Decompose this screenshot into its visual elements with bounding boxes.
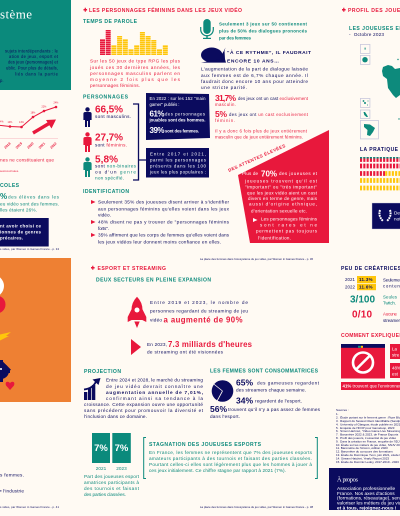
stat: masculins [95, 105, 131, 119]
heading: à ce rythme [227, 49, 311, 65]
footer: page 41: s vidéo, par Women in Games France - p. 41 [0, 505, 59, 509]
icon: broken heart [6, 382, 14, 390]
text block: 70%: 70% [261, 170, 277, 178]
text block: croissance. Cette expansion ouvre une opportunité [84, 402, 203, 407]
section: écoles: COLES [0, 183, 20, 189]
bullet: 35% [91, 200, 230, 218]
text block: 70%: "important" ou "très important" [245, 185, 317, 190]
sources list: 6. Simon Hartmut, "Video Game Live Streaming" [336, 429, 400, 433]
pictogram grid [360, 158, 400, 188]
text block: Part des joueuses esport [84, 474, 140, 479]
panel: introduction écosystème [0, 0, 71, 90]
sources list: 4. University of Glasgow, étude publiée en 2021 [336, 422, 400, 426]
panel: temps de parole [83, 19, 181, 88]
bullet: personnages rares: Les personnages féminins [261, 216, 318, 222]
text block: 70%: aussi d'origine ethnique, [249, 202, 317, 207]
map: France [382, 59, 400, 120]
text block: confirmant ainsi sa tendance à la [106, 396, 203, 401]
text block: Pourtant celles-ci elles sont légèrement plus que les hommes à jouer à [149, 462, 312, 467]
text block: et à tous, rejoignez-nous ! [337, 505, 397, 511]
line chart: part de femmes: 2018 [3, 141, 12, 150]
text block: parité: faudrait donc encore 10 ans pour atteindre [201, 79, 308, 84]
panel: personnages [83, 93, 210, 180]
heading: personnages féminins: LES PERSONNAGES FÉMININS DANS LES JEUX VIDÉO [89, 6, 242, 14]
stat: 2021 [345, 276, 376, 283]
text: seulement [383, 277, 400, 288]
stat: 0/10: Aucune [383, 312, 398, 317]
stat: féminins: 27,7% [95, 133, 123, 144]
heading: LES FEMMES SONT CONSOMMATRICES [210, 368, 319, 374]
intro text: p. [0, 78, 4, 83]
sources list: 15. Étude de Dominic Ledoy, 2017-2019 - 2023 [336, 459, 399, 464]
stat: non-binaires: sont non-binaires [95, 164, 137, 169]
bullet: 35%: vidéo. [98, 212, 111, 218]
bullet: personnages rares [253, 216, 318, 240]
bullet: 35%: aux personnages féminins qu'elles voient dans les jeux [98, 206, 230, 211]
chart caption [0, 158, 54, 173]
panel: orange illustration [0, 258, 71, 402]
pie chart [212, 380, 233, 403]
card: 48% [390, 363, 400, 378]
line chart: part de femmes: 22% [42, 106, 47, 108]
stat: 3/100: Seules [383, 294, 398, 299]
stat: 2022: 11.6% [359, 285, 373, 290]
sources list: 9. Dans la création en France, enquête de l'IDJ [336, 439, 400, 443]
section: écoles: % [0, 192, 7, 201]
box: top 100 2017-2021: jeux les plus populaires : [149, 170, 206, 175]
year labels [96, 466, 127, 471]
stat: féminins [95, 133, 127, 147]
icon: play triangle [131, 339, 141, 355]
stat: 31,7%: masculin. [215, 102, 236, 107]
text block [89, 59, 181, 88]
box: main gamer 2022: 39% [150, 126, 164, 135]
box: main gamer 2022: 61% [150, 109, 164, 118]
box: main gamer 2022: jouables sont des hommes. [148, 118, 206, 122]
text block: amateurs participants à des tournois et faisant des parties classées. [149, 456, 312, 461]
bracket [133, 104, 146, 180]
bullet: personnages rares: l'identification. [258, 236, 291, 240]
chart caption: ses/courrisées. [0, 169, 19, 173]
text block [84, 474, 140, 497]
footer: page 34: s vidéo, par Women in Games France - p. 34 [0, 247, 59, 251]
stat: non-binaires: ou d'un genre [95, 170, 136, 175]
panel: consommatrices [210, 368, 321, 419]
icon: person teal [83, 157, 92, 177]
bullet: 35% corps [91, 232, 230, 244]
heading: IDENTIFICATION [83, 189, 129, 195]
icon: white bubble [0, 274, 4, 298]
line chart: part de femmes: 14% [19, 121, 25, 124]
text block [337, 486, 400, 511]
panel: identification [83, 189, 230, 244]
bullet: 48%: 48% disent ne pas y trouver de "personnages féminins [98, 220, 230, 224]
text: dialogues: Seulement 3 jeux sur 50 contiennent [219, 22, 308, 26]
icon: microphone [201, 19, 213, 39]
stat: 34% [236, 395, 302, 405]
text: 7.3 milliards: 7.3 milliards d'heures [168, 340, 253, 349]
text block: moyenne 2 fois plus que les [90, 77, 181, 82]
heading: À propos [337, 476, 358, 484]
stat: non-binaires: 5,8% [95, 155, 118, 166]
icon: rocket [128, 297, 146, 328]
icon: red circle [0, 296, 6, 314]
stat: 65%: des streamers chaque semaine. [236, 388, 306, 392]
line chart: part de femmes: 24% [54, 102, 59, 104]
line chart: part de femmes: 4% [0, 120, 4, 124]
text block: joués ces 30 dernières années, les [89, 65, 181, 70]
sources list [336, 408, 400, 464]
intro text: des jeux (personnages) et [8, 60, 59, 65]
text: bas de page gauche [0, 472, 24, 494]
panel: projection [84, 369, 204, 419]
stat: 3/100: Twitch. [383, 300, 396, 305]
arrow: hausse [33, 120, 56, 133]
heading: PROJECTION [84, 369, 121, 375]
text block: 70% [242, 170, 318, 214]
text: streaming 90%: vidéo [150, 318, 162, 322]
heading: STAGNATION DES JOUEUSES ESPORTS [149, 442, 262, 448]
icon: gear [0, 360, 11, 382]
bar chart [102, 30, 165, 55]
bullet: 35%: Seulement 35% des joueuses disent arriver à s'identifier [98, 200, 229, 204]
footer: page 38: La place des femmes dans l'écosystème du jeu vidéo, par Women in Games France - p. 38 [200, 505, 313, 509]
icon: growth bars [84, 378, 100, 400]
heading: LA PRATIQUE [360, 147, 399, 153]
stat: 0/10 [352, 310, 400, 323]
banner label: DES ATTENTES ÉLEVÉES [227, 143, 286, 173]
stat: 31,7% [215, 93, 309, 107]
text: 6 fois plus: Il y a donc 6 fois plus de jeux entièrement [215, 128, 308, 133]
text block [84, 377, 204, 419]
heading: esport et streaming: ESPORT ET STREAMING [98, 266, 166, 272]
text: 6 fois plus: masculin que de jeux entièrement féminins. [215, 134, 303, 139]
section: écoles: lles étaient 26%. [0, 208, 37, 213]
text: dialogues: plus de 50% des dialogues prononcés [219, 28, 307, 34]
box: main gamer 2022: gamer" publiés : [150, 102, 180, 107]
callout: école box [0, 218, 49, 246]
bullet: 35% corps: les jeux vidéos leur donnent moins confiance en elles. [98, 240, 221, 244]
stat: non-binaires: non spécifié. [95, 176, 124, 180]
line chart: part de femmes: 2022 [49, 141, 58, 150]
text: streaming 90%: Entre 2019 et 2023, le nombre de [150, 300, 248, 305]
stat: 34%: regardent de l'esport. [255, 399, 302, 404]
panel: peu de créatrices [341, 264, 400, 323]
stat: masculins: 66,5% [95, 105, 123, 116]
stat: 65%: des gameuses regardent [257, 381, 320, 386]
callout: école box: nt avoir choisi ce [0, 224, 42, 228]
text block: parité: une stricte parité. [201, 85, 247, 90]
text: 7.3 milliards [147, 340, 253, 354]
stat: 2021: 2021 [345, 277, 356, 282]
box: main gamer 2022: sont des femmes. [165, 128, 199, 134]
line chart: part de femmes: 2019 [15, 141, 23, 150]
stat: 31,7%: 31,7% [215, 93, 236, 103]
text block: parité: aux femmes est de 6,7% chaque année. Il [201, 73, 308, 78]
bar 2023: 7% [115, 443, 129, 454]
stat: 5% [215, 109, 309, 123]
stat: 0/10: streamer [383, 318, 400, 323]
section: écoles [0, 183, 60, 213]
text: bas de page gauche: • l'industrie [0, 488, 24, 494]
sources list: Sources : [336, 408, 349, 412]
bracket left [144, 438, 146, 478]
heading: à ce rythme: “À CE RYTHME”, IL FAUDRAIT [227, 49, 311, 56]
text block: En France, les femmes ne représentent que 7% des joueuses esports [149, 450, 313, 455]
year labels: 2023 [116, 466, 127, 471]
icon: person red [83, 132, 92, 152]
intro text [0, 48, 59, 83]
text block [149, 450, 313, 473]
panel: part des joueuses esport [84, 433, 140, 497]
icon: laurel [379, 210, 391, 221]
text: dialogues [219, 22, 308, 40]
icon: person navy [83, 107, 92, 127]
text: streaming 90% [150, 300, 248, 324]
stat: 56% [210, 404, 321, 419]
line chart: part de femmes: 2021 [38, 141, 46, 150]
text block: des tournois et faisant [84, 486, 140, 491]
card: streamers: stre [392, 353, 400, 358]
text: 7.3 milliards: En 2023, [147, 342, 167, 347]
stat: 34%: 34% [236, 395, 253, 405]
text block: ces jeux initialement. Ce chiffre stagne par rapport à 2021 (7%). [149, 468, 286, 473]
map: territoires [362, 48, 375, 136]
line chart: part de femmes [0, 102, 59, 150]
callout: école box: ionnes de genres [0, 230, 42, 234]
text: dialogues: par des femmes [219, 36, 251, 40]
intro text: ation de jeux, esport et [9, 54, 59, 59]
stat: féminins: sont féminins. [95, 142, 127, 147]
line chart: part de femmes: 14% [8, 121, 13, 124]
text block: personnages masculins parlent en [90, 71, 180, 76]
sources list: 11. Baromètre de l'Arcom, édition 2023 [336, 446, 388, 450]
text block: Association professionnelle [337, 486, 395, 492]
line chart: part de femmes: 18% [30, 112, 36, 114]
box: main gamer 2022: En 2022 : sur les 152 "main [150, 96, 206, 101]
bullet: personnages rares: permettent pas toujours [256, 228, 318, 234]
stat: 5%: des jeux ont un cast exclusivement [229, 112, 309, 117]
text block: Entre 2024 et 2028, le marché du streaming [106, 377, 203, 382]
bullet: 48%: forts". [98, 226, 109, 231]
stat: non-binaires [95, 155, 137, 180]
line chart: part de femmes: 2020 [26, 141, 35, 150]
map: inset boxes [360, 44, 378, 139]
text block: Sur les 50 jeux de type RPG les plus [90, 59, 181, 64]
stat: 2022: 2022 [345, 284, 356, 290]
card: streamers: La [392, 347, 397, 352]
heading: à ce rythme: ENCORE 10 ANS… [227, 59, 279, 65]
text block: France. Nos axes d'actions [337, 491, 395, 497]
panel: des attentes élevées [227, 130, 329, 243]
icon: snail [201, 48, 226, 63]
stat: 56%: dans l'esport. [210, 414, 240, 419]
text block: des parties classées. [84, 492, 126, 497]
stat: 3/100 [350, 294, 398, 306]
stat: 31,7%: des jeux ont un cast exclusivement [238, 96, 309, 101]
box: top 100 2017-2021: présents dans les 100 [150, 163, 207, 168]
sources list: 1. [336, 412, 339, 416]
stat: 65%: 65% [236, 377, 253, 387]
sources list: 5. Enquête de l'IFOP pour Gameloop, 2023 [336, 426, 395, 430]
intro text: liés dans la partie [15, 71, 59, 76]
panel: stagnation des joueuses esports [144, 438, 317, 478]
stat: 2022 [345, 284, 376, 290]
stat: 2021: 11.3% [359, 277, 373, 282]
bullet: 48% [91, 220, 230, 231]
panel: la pratique [360, 147, 400, 188]
bar 2021: 7% [94, 443, 108, 454]
stat: 0/10: 0/10 [352, 310, 372, 320]
text block: parité [201, 66, 308, 90]
heading: TEMPS DE PAROLE [83, 19, 138, 25]
callout: école box: précaires. [0, 236, 23, 241]
card: 48%: est [392, 372, 399, 377]
footer: page 36: La place des femmes dans l'écosystème du jeu vidéo, par Women in Games France - p. 36 [200, 257, 313, 261]
text block: 70%: divers en terme de genre, mais [248, 196, 318, 201]
text block: augmentation annuelle de 7,01%, [106, 390, 203, 395]
stat: 5%: féminin. [215, 118, 235, 123]
stat: 56%: trouvent qu'il n'y a pas assez de femmes [228, 407, 321, 412]
sources list: 8. Profil des joueurs, L'essentiel du jeu vidéo [336, 436, 396, 440]
text block: amatrices participants à [84, 480, 139, 485]
text block: personnages féminins. [90, 83, 140, 88]
text: 7.3 milliards: de streaming ont été visionnées [147, 350, 224, 354]
box: top 100 2017-2021: parmi les personnages [150, 157, 207, 162]
box: main gamer 2022 [146, 93, 210, 140]
year labels: 2021 [96, 466, 107, 471]
text block: 70%: Plus de [242, 171, 258, 176]
icon: lightning [0, 332, 11, 342]
bracket right [315, 438, 317, 478]
date: - Octobre 2023 [349, 32, 384, 37]
stat: masculins: sont masculins. [95, 114, 131, 119]
text block: 70%: joueuses trouvent qu'il est [244, 179, 318, 184]
text block: 70%: des joueuses et [279, 171, 318, 176]
section: écoles: des élèves dans les [8, 195, 60, 200]
text: streaming 90%: a augmenté de 90% [164, 315, 243, 324]
text block: sans précédent pour promouvoir la diversité et [84, 408, 204, 413]
chart caption: nes ne constituaient que [0, 158, 54, 163]
stat: 56%: 56% [210, 404, 227, 414]
text block: parité: L'augmentation de la part de dialogue laissée [201, 66, 308, 72]
panel: carte [349, 26, 400, 139]
intro text: ublic. Pour plus de détails, [6, 65, 58, 70]
heading: PERSONNAGES [83, 94, 129, 100]
panel: comment expliquer [341, 333, 400, 390]
card: streamers [390, 344, 400, 359]
bullet: 35% corps: 35% affirment que les corps de femmes qu'elles voient dans [98, 232, 230, 238]
panel: à propos [329, 468, 400, 511]
callout: navy laurel box [372, 203, 400, 229]
box: main gamer 2022: des personnages [165, 112, 205, 116]
title: stème [0, 6, 32, 22]
text: streaming 90%: personnes regardant du streaming de jeu [150, 308, 248, 314]
text block: l'inclusion dans ce domaine. [84, 414, 147, 419]
bullet: personnages rares: sont rares et ne [260, 222, 317, 228]
sources list: 12. Baromètre du concours des formations [336, 450, 393, 454]
heading: PEU DE CRÉATRICES [341, 264, 400, 272]
heading: deux secteurs: DEUX SECTEURS EN PLEINE EXPANSION [96, 277, 211, 283]
intro text: sujets interdépendants : le [5, 48, 59, 54]
stat: 65% [236, 377, 320, 392]
text block: 70%: d'orientation sexuelle etc. [251, 208, 307, 214]
stat: 5%: 5% [215, 109, 227, 119]
text block: 70%: que les jeux vidéo aient un cast [247, 190, 318, 196]
browser window with ban icon [341, 344, 385, 378]
section: écoles: eu vidéo sont des femmes. [0, 201, 59, 206]
sources list: 7. Baromètre 2022 & 2023, de France Esports [336, 433, 399, 437]
text: bas de page gauche: s femmes. [0, 472, 24, 478]
text: 6 fois plus [215, 128, 308, 139]
stat: 3/100: 3/100 [350, 294, 375, 306]
sources list: 14. Stream Hatchet, Yearly Report 2023 [336, 456, 389, 460]
box: top 100 2017-2021 [146, 148, 209, 178]
box: top 100 2017-2021: Entre 2017 et 2021, [150, 152, 206, 157]
text block: de jeu vidéo devrait connaître une [106, 384, 203, 389]
